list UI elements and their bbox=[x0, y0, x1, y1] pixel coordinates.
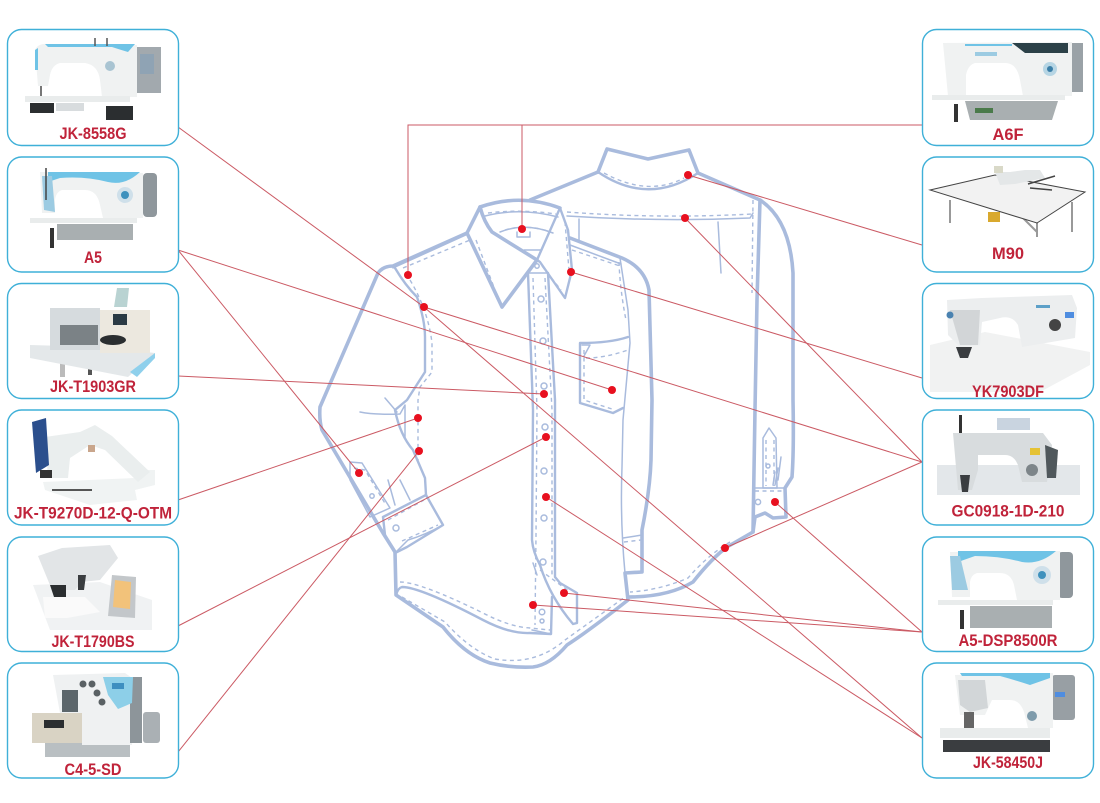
label: C4-5-SD bbox=[64, 761, 122, 779]
label: JK-58450J bbox=[973, 754, 1043, 772]
label: JK-T1790BS bbox=[52, 633, 134, 651]
card: M90 bbox=[922, 157, 1094, 272]
card: JK-T1790BS bbox=[8, 537, 178, 652]
collar bbox=[467, 200, 572, 307]
label: YK7903DF bbox=[972, 383, 1044, 401]
card: JK-58450J bbox=[922, 663, 1094, 778]
icon: JK-58450J machine bbox=[940, 673, 1075, 752]
front of shirt bbox=[320, 200, 652, 667]
icon: YK7903DF machine bbox=[930, 295, 1090, 392]
placket bbox=[528, 264, 577, 634]
label: A5-DSP8500R bbox=[958, 632, 1058, 650]
icon: GC0918-1D-210 machine bbox=[937, 415, 1080, 495]
label: M90 bbox=[992, 245, 1024, 263]
label: JK-8558G bbox=[60, 125, 126, 143]
label: JK-T1903GR bbox=[50, 378, 136, 396]
back of shirt bbox=[530, 149, 793, 597]
label: GC0918-1D-210 bbox=[952, 502, 1064, 520]
card: JK-T9270D-12-Q-OTM bbox=[8, 410, 178, 525]
card: A5 bbox=[8, 157, 178, 272]
card: A5-DSP8500R bbox=[922, 537, 1094, 652]
icon: JK-T9270D-12-Q-OTM machine bbox=[32, 418, 155, 505]
label: A6F bbox=[992, 126, 1024, 144]
red marker dots bbox=[355, 171, 779, 609]
icon: A5 machine bbox=[30, 168, 157, 248]
pocket bbox=[580, 337, 628, 413]
card: JK-T1903GR bbox=[8, 284, 178, 398]
shirt line drawing bbox=[320, 149, 793, 667]
card: JK-8558G bbox=[8, 30, 178, 146]
icon: A5-DSP8500R machine bbox=[938, 551, 1073, 629]
card: YK7903DF bbox=[922, 284, 1094, 401]
icon: C4-5-SD machine bbox=[32, 673, 160, 757]
icon: JK-T1903GR machine bbox=[30, 288, 155, 377]
left sleeve and armhole bbox=[350, 268, 443, 553]
label: A5 bbox=[84, 249, 102, 267]
icon: A6F machine bbox=[932, 42, 1083, 122]
connector lines bbox=[178, 125, 922, 752]
icon: JK-8558G machine bbox=[25, 38, 161, 120]
card: C4-5-SD bbox=[8, 663, 178, 779]
label: JK-T9270D-12-Q-OTM bbox=[14, 504, 172, 522]
icon: JK-T1790BS machine bbox=[33, 545, 152, 630]
card: A6F bbox=[922, 30, 1094, 146]
card: GC0918-1D-210 bbox=[922, 410, 1094, 525]
icon: M90 machine bbox=[930, 166, 1085, 237]
